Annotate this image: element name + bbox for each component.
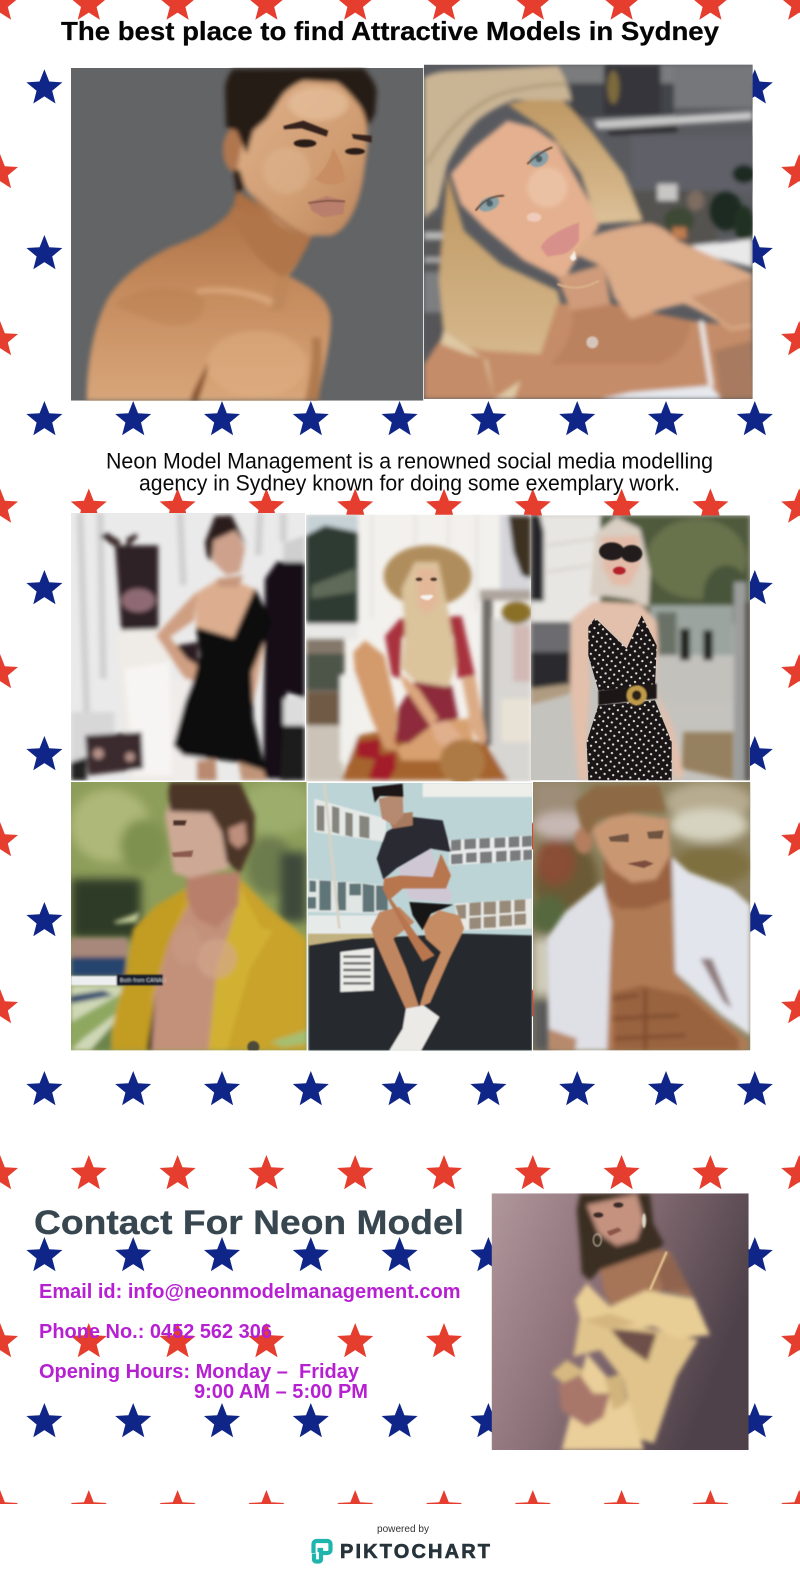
photo: man sitting on clothing bin: [308, 783, 533, 1051]
photo: man in yellow coat: [70, 782, 313, 1053]
powered by label: powered by: [377, 1523, 430, 1535]
body text: Neon Model Management is a renowned social media modelling: [106, 448, 713, 474]
icon: Piktochart logo: [314, 1541, 330, 1562]
contact details: Opening Hours: Monday – Friday: [39, 1360, 360, 1383]
contact details: [39, 1280, 460, 1403]
title: The best place to find Attractive Models in Sydney: [61, 16, 720, 46]
photo: woman in straw hat and red dress: [306, 515, 532, 785]
photo: male model on grey backdrop: [71, 68, 423, 401]
photo: blonde model in beige hat: [424, 65, 757, 399]
contact details: Phone No.: 0452 562 306: [39, 1320, 272, 1343]
body text: agency in Sydney known for doing some exemplary work.: [139, 470, 680, 496]
Piktochart wordmark: PIKTOCHART: [340, 1541, 490, 1563]
photo: man in yellow coat: Both from CANALI: [120, 978, 167, 984]
photo: blonde woman in polka-dot dress and sunglasses: [531, 515, 750, 782]
photo: woman in cream ruffled dress: [492, 1193, 749, 1450]
photo: woman in black dress at event: [71, 513, 305, 781]
body text: [106, 448, 713, 496]
contact details: 9:00 AM – 5:00 PM: [194, 1380, 368, 1403]
photo: man in open white shirt: [529, 782, 752, 1052]
contact heading: Contact For Neon Model: [34, 1204, 464, 1242]
contact details: Email id: info@neonmodelmanagement.com: [39, 1280, 460, 1303]
